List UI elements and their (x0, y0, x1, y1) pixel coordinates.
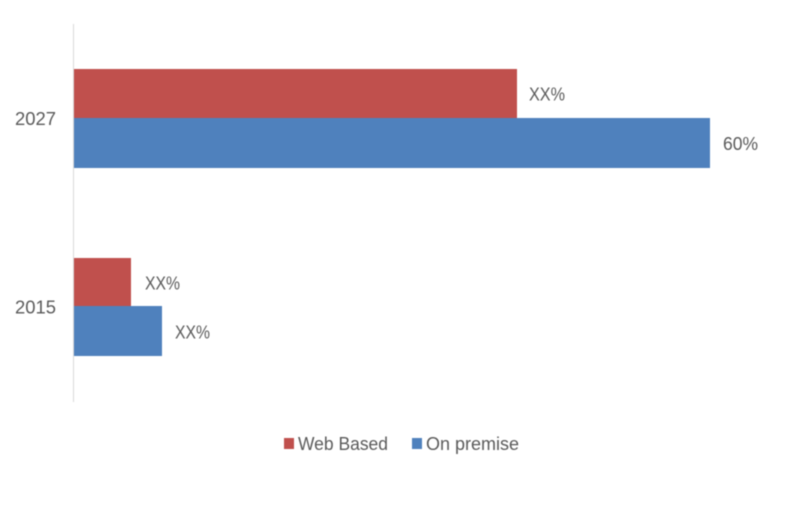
bar: 2027 Web Based (74, 69, 517, 119)
group: 2027 (15, 69, 758, 168)
value label: 2015 On premise: XX% (175, 322, 210, 342)
bar: 2015 On premise (74, 306, 162, 356)
value label: 2027 On premise: 60% (723, 134, 758, 154)
bar: 2027 On premise (74, 118, 710, 168)
value label: 2027 Web Based: XX% (529, 84, 565, 104)
bar: 2015 Web Based (74, 258, 131, 307)
legend item: Web Based: Web Based (298, 434, 388, 454)
category label: 2015: 2015 (15, 298, 56, 318)
legend item: On premise: On premise (426, 434, 519, 454)
category label: 2027: 2027 (15, 109, 56, 129)
value label: 2015 Web Based: XX% (145, 274, 180, 294)
legend (284, 434, 519, 454)
group: 2015 (15, 258, 210, 356)
